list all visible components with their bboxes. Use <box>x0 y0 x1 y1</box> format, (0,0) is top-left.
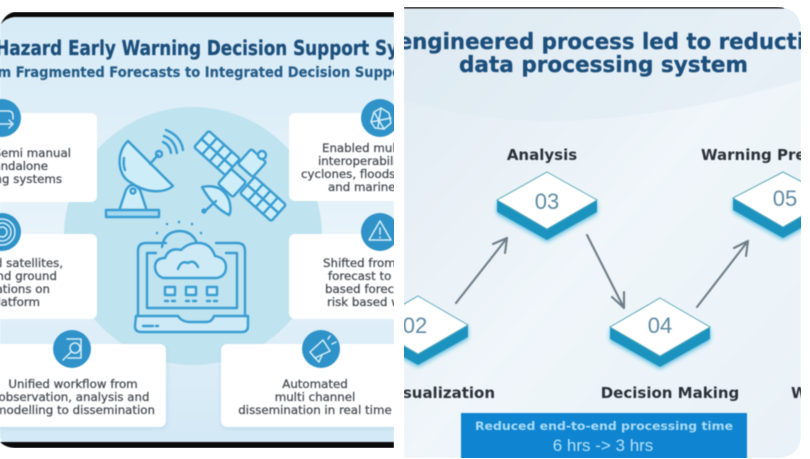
card text: risk based warnings <box>327 295 445 309</box>
panel background <box>404 7 801 458</box>
top black line <box>404 7 784 8</box>
card text: multi channel <box>275 390 355 404</box>
label: analysis: Analysis <box>507 146 577 164</box>
icon: satellite dish <box>106 130 183 217</box>
card text: Shifted from <box>323 256 396 270</box>
card text <box>300 142 394 192</box>
card: automated dissemination <box>221 344 411 429</box>
card: multi hazard interoperability <box>288 112 394 202</box>
step 03 analysis <box>497 172 597 242</box>
card text: observation, analysis and <box>0 390 149 404</box>
title: data processing system <box>459 53 748 78</box>
label: decision making: Decision Making <box>601 384 739 402</box>
card text: Unified workflow from <box>8 377 138 391</box>
icon: laptop with cloud <box>135 222 248 332</box>
icon: warning triangle <box>361 213 399 251</box>
card text: Enabled multi-hazard <box>322 141 448 155</box>
step 05 warning preparation: 05 <box>773 186 797 211</box>
arrow: 04 to 05 <box>697 241 748 307</box>
central circle <box>64 107 322 365</box>
icon: satellite <box>194 131 286 221</box>
icon: hazard map <box>361 99 399 137</box>
card text: dissemination in real time <box>238 403 392 417</box>
step 04 decision making <box>610 298 710 369</box>
icon: radar <box>0 213 21 251</box>
panel background <box>0 12 394 448</box>
callout: reduced processing time <box>461 413 747 459</box>
card text: cyclones, floods <box>301 167 395 181</box>
card: semi manual standalone systems <box>0 113 97 202</box>
card text: and marine <box>328 180 396 194</box>
card text <box>322 257 394 307</box>
callout: reduced processing time: Reduced end-to-end processing time <box>475 419 733 433</box>
icon: document search <box>53 330 91 368</box>
card: unified workflow <box>0 344 167 429</box>
icon: workflow arrows <box>0 99 21 137</box>
card text: interoperability <box>318 154 408 168</box>
background swoosh <box>682 8 800 107</box>
bottom black bar <box>0 442 394 448</box>
top black bar <box>1 12 394 24</box>
card text: Automated <box>282 377 348 391</box>
panel: decision support system <box>0 12 394 448</box>
step 02 visualization <box>404 295 472 370</box>
card text <box>0 256 63 309</box>
card text: based forecasts <box>325 282 418 296</box>
step 02 visualization: 02 <box>403 313 427 338</box>
arrow: 02 to 03 <box>456 238 507 303</box>
card: satellites and ground stations <box>0 234 97 319</box>
card text <box>0 146 71 186</box>
panel: process flow <box>404 7 801 458</box>
icon: megaphone <box>302 330 340 368</box>
title <box>404 31 801 78</box>
arrow: 03 to 04 <box>587 235 624 308</box>
label: visualization: Visualization <box>386 384 495 402</box>
card text: forecast to <box>328 269 391 283</box>
card: impact based forecast <box>288 234 394 320</box>
card text <box>0 377 155 417</box>
card text <box>238 377 392 417</box>
step 04 decision making: 04 <box>648 313 672 338</box>
step 03 analysis: 03 <box>535 189 559 214</box>
callout: reduced processing time: 6 hrs -> 3 hrs <box>553 436 653 455</box>
step 05 warning preparation <box>733 172 810 240</box>
